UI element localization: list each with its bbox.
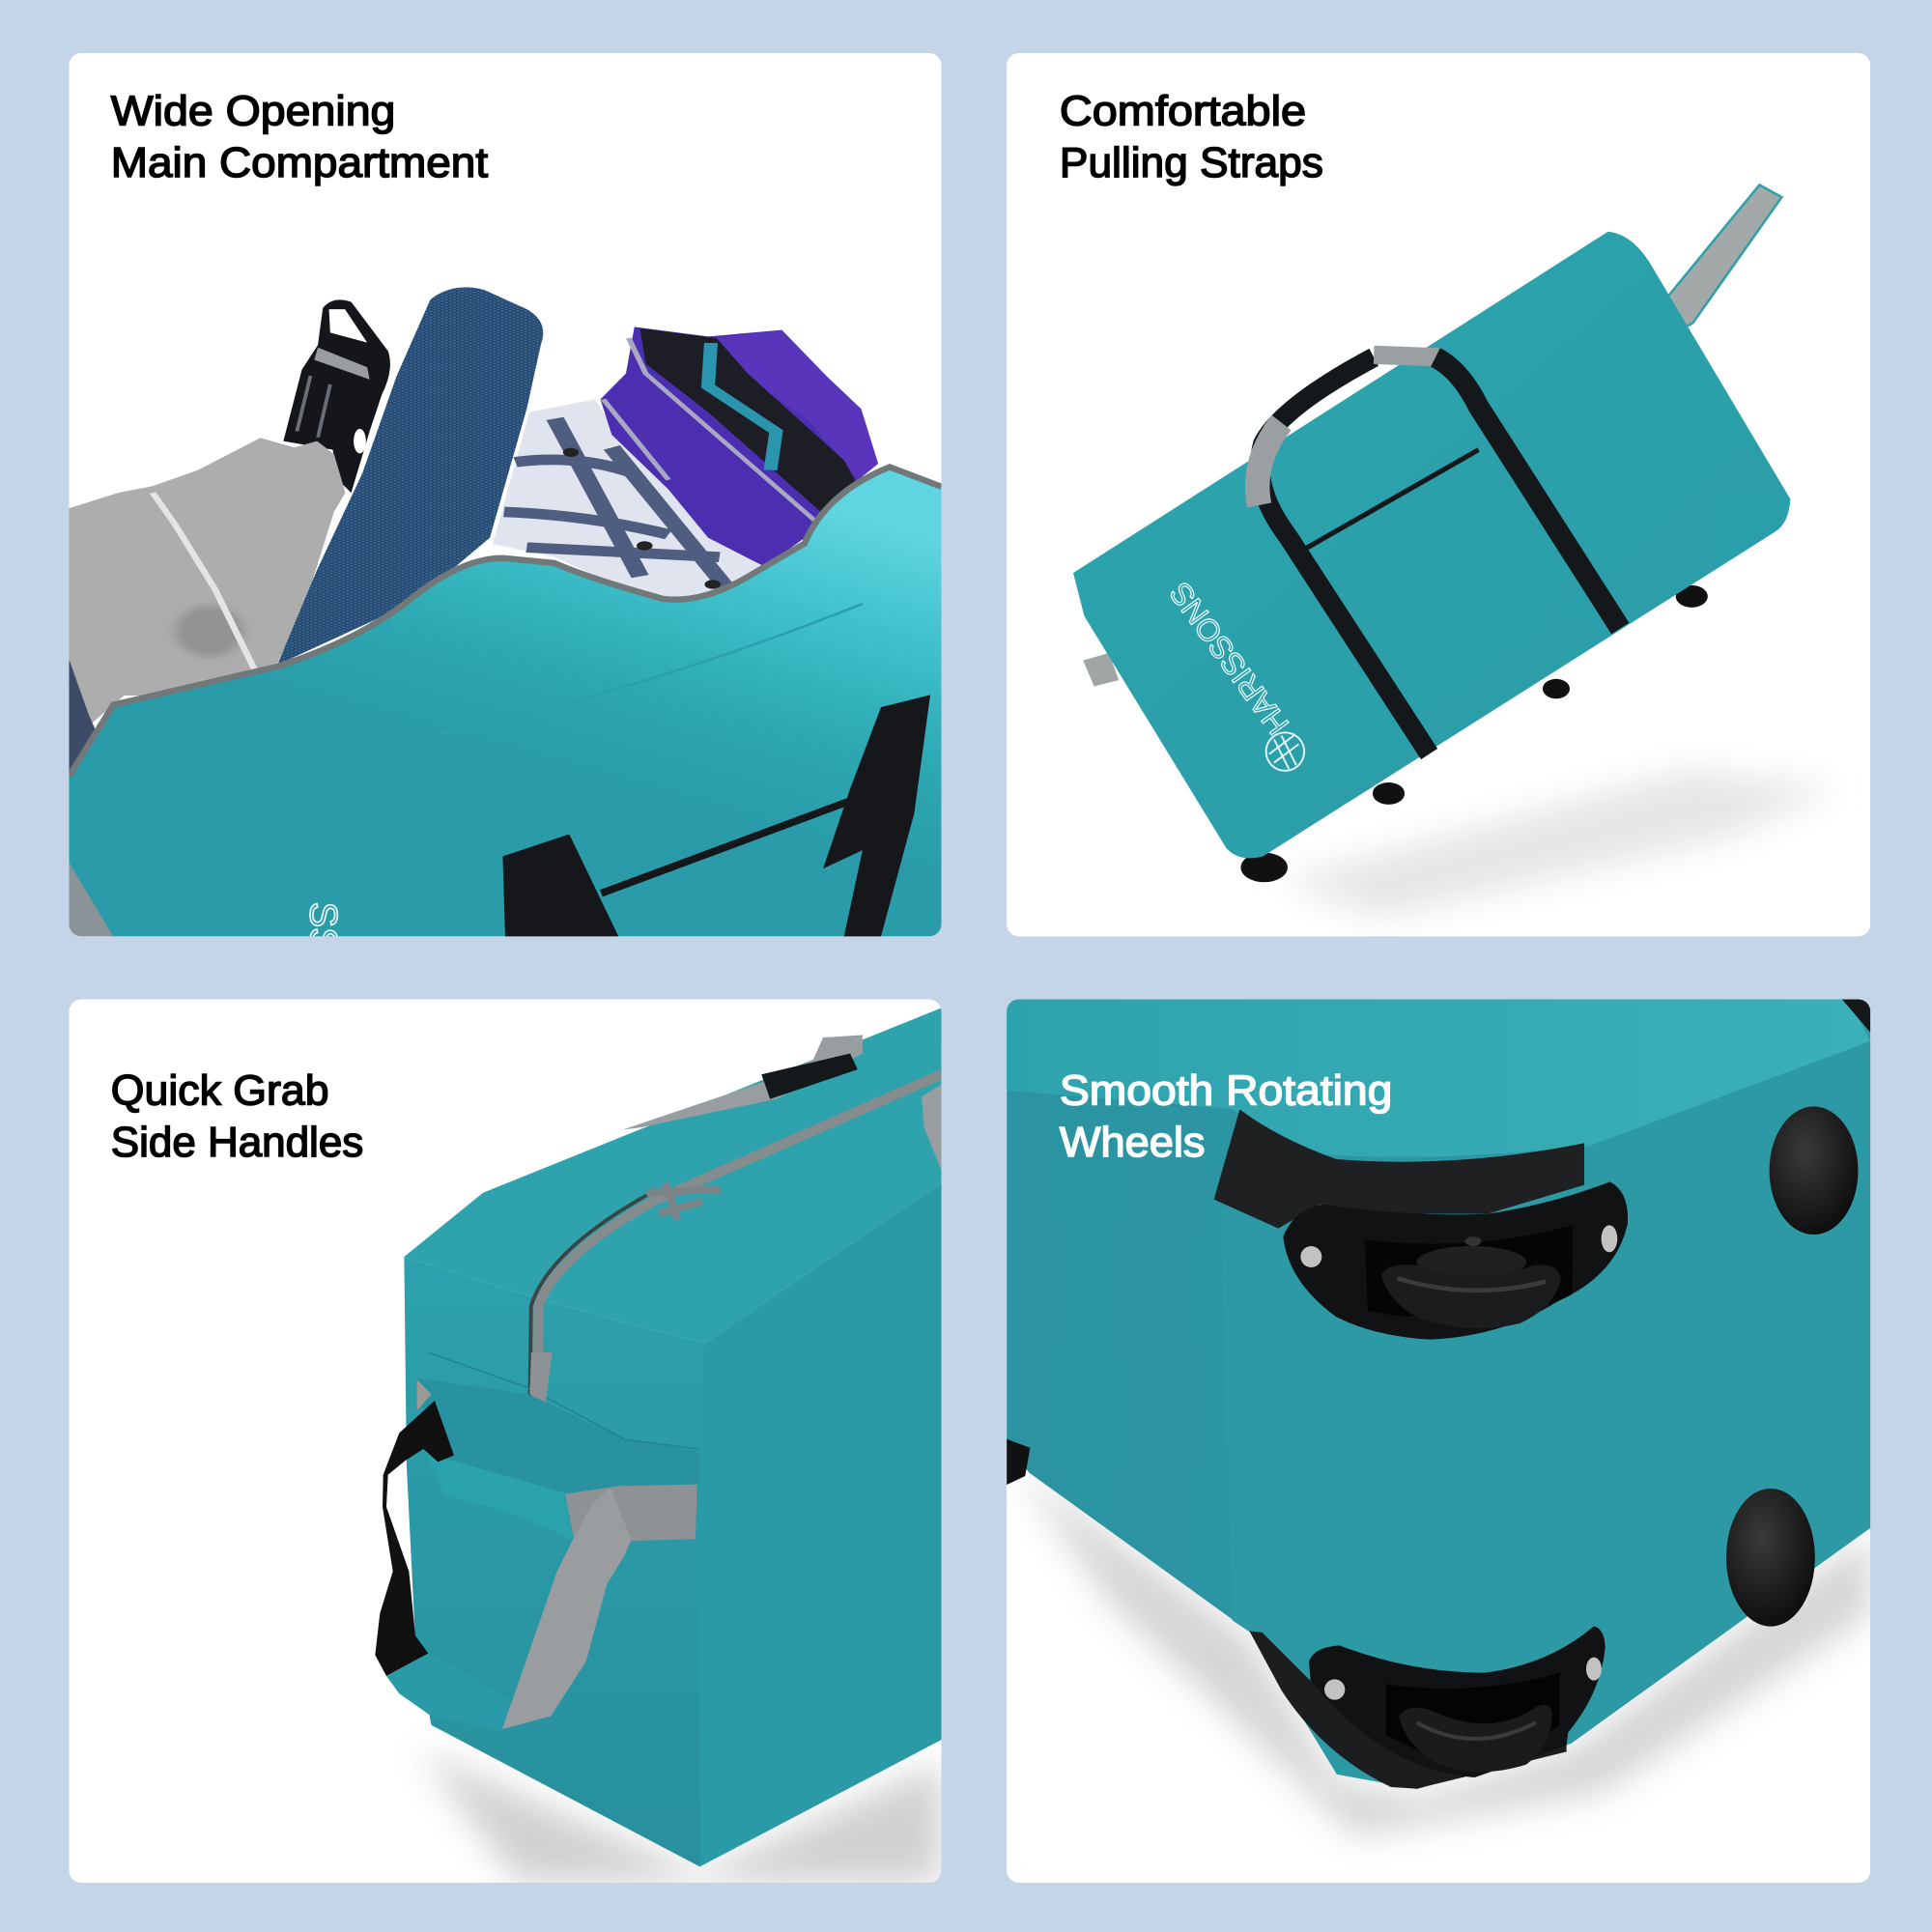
panel: smooth rotating wheels bbox=[1007, 999, 1870, 1883]
panel: wide opening main compartment bbox=[68, 53, 941, 953]
small plaid fold bbox=[70, 659, 95, 771]
heading: pulling straps: Pulling Straps bbox=[1060, 139, 1323, 186]
upper wheel bracket bbox=[1283, 1181, 1628, 1340]
side pocket flap bbox=[415, 1378, 698, 1494]
black carry straps and pocket zip bbox=[502, 695, 930, 936]
icon: black water bottle bbox=[283, 299, 390, 493]
logo fragment: SS bbox=[301, 902, 344, 953]
floor shadow bbox=[419, 1749, 941, 1883]
heading: pulling straps: Comfortable bbox=[1060, 87, 1306, 134]
grey side handle bbox=[502, 1488, 631, 1729]
black corner guard bbox=[1214, 1109, 1584, 1229]
panel: quick grab side handles bbox=[69, 999, 941, 1883]
zip end bbox=[529, 1352, 553, 1403]
black side handle bbox=[375, 1401, 454, 1676]
lower handle base bbox=[386, 1654, 429, 1715]
rubber foot lower right bbox=[1726, 1489, 1815, 1627]
heading: rotating wheels bbox=[1060, 1066, 1392, 1166]
lower wheel bracket bbox=[1309, 1626, 1605, 1777]
heading: wide opening: Main Compartment bbox=[111, 139, 488, 186]
purple packing cube bbox=[601, 327, 878, 567]
heading: side handles bbox=[111, 1066, 363, 1166]
grey tab bbox=[417, 1379, 432, 1410]
heading: pulling straps bbox=[1060, 87, 1323, 186]
blue rolled mat bbox=[277, 287, 543, 665]
bag right face bbox=[690, 1182, 941, 1866]
grab handles bbox=[1258, 355, 1620, 754]
heading: side handles: Side Handles bbox=[111, 1119, 363, 1166]
lower black guard bbox=[1249, 1631, 1567, 1789]
floor shadow bbox=[1282, 770, 1836, 918]
top grab strap bbox=[622, 1035, 863, 1130]
plaid shirt bbox=[493, 399, 771, 599]
teal bag body bbox=[69, 467, 941, 936]
grey hoodie bbox=[68, 438, 346, 724]
heading: side handles: Quick Grab bbox=[111, 1066, 329, 1114]
heading: wide opening bbox=[111, 87, 488, 186]
rubber foot upper right bbox=[1770, 1106, 1858, 1235]
wheels bbox=[1240, 585, 1708, 882]
bag left end face bbox=[404, 1257, 705, 1866]
top zip and zipper pull bbox=[529, 1074, 941, 1399]
flap seam bbox=[428, 1352, 698, 1449]
grey webbing anchor bbox=[565, 1485, 697, 1555]
bag top face bbox=[404, 1008, 941, 1343]
bag body bbox=[1007, 999, 1870, 1789]
side tab bbox=[1083, 653, 1119, 686]
panel: comfortable pulling straps bbox=[1007, 53, 1870, 936]
teal bag body bbox=[1073, 232, 1790, 858]
bag top face bbox=[1007, 999, 1870, 1157]
bag right panel bbox=[1220, 1041, 1870, 1789]
side handle pocket strap bbox=[431, 1459, 573, 1539]
heading: rotating wheels: Smooth Rotating bbox=[1060, 1066, 1392, 1114]
left rubber foot bbox=[1007, 1439, 1030, 1485]
heading: rotating wheels: Wheels bbox=[1060, 1119, 1205, 1166]
heading: wide opening: Wide Opening bbox=[111, 87, 395, 134]
top corner zip detail bbox=[1842, 999, 1870, 1033]
pull tab top bbox=[1659, 185, 1781, 332]
brand logo: HARISSONS bbox=[1162, 576, 1295, 741]
shadow under bag bbox=[1016, 1466, 1870, 1836]
